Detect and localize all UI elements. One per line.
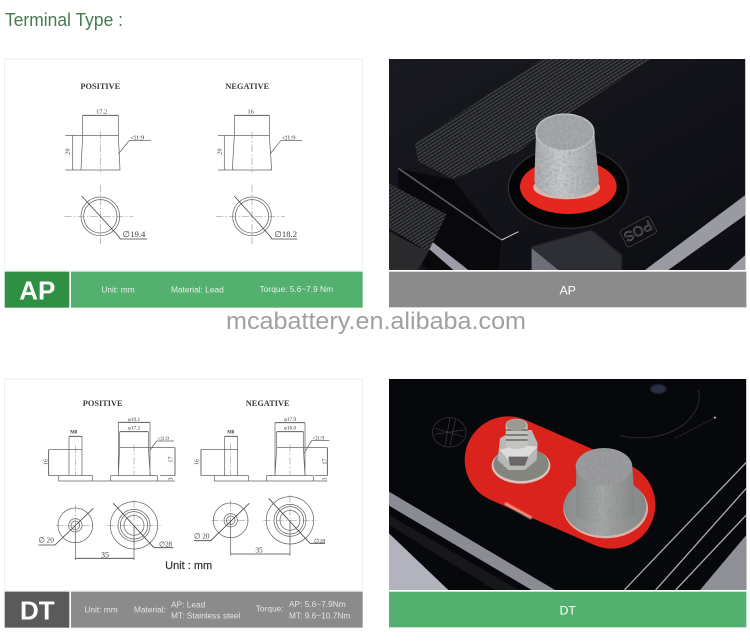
lead post	[563, 448, 648, 538]
AP badge	[5, 272, 69, 308]
positive DT drawing	[38, 399, 175, 560]
panel: DT photo	[389, 379, 746, 590]
AP photo caption	[389, 272, 746, 307]
unit note: Unit : mm	[165, 560, 212, 572]
watermark: mcabattery.en.alibaba.com	[226, 308, 526, 335]
positive DT drawing: 16	[43, 459, 49, 465]
DT spec bar: MT: 9.6~10.7Nm	[289, 610, 350, 620]
AP spec bar: Torque: 5.6~7.9 Nm	[260, 284, 333, 294]
DT photo caption: DT	[559, 603, 576, 617]
battery edges	[389, 492, 555, 590]
positive DT drawing: ◁1:9	[157, 436, 169, 442]
negative DT drawing: 3	[323, 477, 329, 480]
DT spec bar: Material:	[134, 605, 166, 615]
negative AP drawing: NEGATIVE	[225, 82, 270, 91]
lead post	[533, 114, 600, 199]
negative DT drawing: NEGATIVE	[246, 399, 290, 408]
positive DT drawing: 3	[168, 477, 174, 480]
DT spec bar: AP: Lead	[171, 600, 206, 610]
negative DT drawing: ∅28	[314, 538, 325, 545]
negative DT drawing: 16	[195, 459, 201, 465]
positive DT drawing: ∅28	[159, 541, 173, 549]
panel: AP drawing	[5, 59, 363, 308]
negative DT drawing: ◁1:9	[313, 436, 324, 442]
DT spec bar: MT: Stainless steel	[171, 611, 241, 621]
negative AP drawing: 16	[248, 109, 254, 116]
title: Terminal Type :	[5, 9, 123, 30]
positive DT drawing: 17	[168, 457, 174, 463]
positive AP drawing	[64, 82, 151, 246]
negative AP drawing: 20	[216, 149, 223, 155]
bolt	[492, 419, 550, 484]
DT spec bar: Torque:	[256, 604, 284, 614]
DT spec bar	[71, 592, 363, 628]
negative DT drawing: 17	[323, 459, 329, 465]
panel: AP photo	[389, 59, 745, 270]
POS mark: POS	[621, 217, 655, 245]
DT spec bar: Unit: mm	[84, 605, 118, 615]
negative DT drawing: M8	[227, 431, 235, 436]
DT badge: DT	[20, 595, 55, 625]
negative DT drawing: φ16.0	[284, 426, 297, 432]
vent cap arc	[620, 384, 716, 438]
strap	[415, 59, 652, 179]
AP spec bar: Material: Lead	[171, 284, 224, 294]
positive DT drawing: φ19.1	[128, 417, 141, 423]
DT badge	[5, 592, 69, 628]
DT photo caption	[389, 592, 746, 627]
negative AP drawing: ∅18.2	[274, 229, 297, 239]
plus mark	[433, 418, 466, 447]
negative DT drawing	[194, 399, 329, 556]
positive DT drawing: POSITIVE	[83, 399, 123, 408]
positive AP drawing: 20	[65, 149, 72, 155]
terminal seat	[508, 147, 628, 228]
DT spec bar: AP: 5.6~7.9Nm	[289, 599, 346, 609]
red plate	[508, 460, 612, 505]
AP badge: AP	[19, 275, 55, 305]
positive DT drawing: M8	[70, 431, 78, 436]
negative DT drawing: φ17.9	[284, 417, 297, 423]
positive AP drawing: ∅19.4	[123, 229, 146, 239]
AP photo caption: AP	[559, 283, 576, 297]
AP spec bar: Unit: mm	[101, 284, 135, 294]
positive DT drawing: 35	[101, 550, 109, 559]
negative AP drawing: ◁1:9	[282, 134, 296, 141]
AP spec bar	[71, 272, 363, 308]
negative AP drawing	[216, 82, 302, 246]
box edges	[398, 168, 502, 270]
positive DT drawing: ∅ 20	[38, 536, 54, 545]
panel: DT drawing	[5, 379, 363, 628]
positive AP drawing: POSITIVE	[80, 82, 121, 91]
positive AP drawing: ◁1:9	[131, 134, 145, 141]
positive AP drawing: 17.2	[96, 109, 107, 116]
negative DT drawing: ∅ 20	[194, 532, 210, 541]
positive DT drawing: φ17.2	[128, 426, 141, 432]
negative DT drawing: 35	[255, 545, 263, 554]
